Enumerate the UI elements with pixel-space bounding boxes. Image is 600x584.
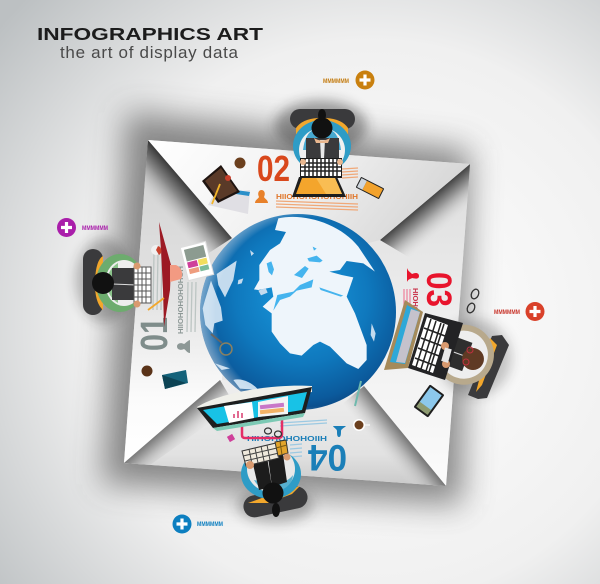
pencil xyxy=(148,298,164,310)
monitor edge xyxy=(159,222,171,327)
person 03 xyxy=(384,300,511,399)
text lines xyxy=(280,420,327,457)
fold shadow: bottom-right xyxy=(340,386,446,486)
person icon xyxy=(255,190,268,203)
globe xyxy=(200,214,396,410)
laptop xyxy=(384,300,463,380)
envelope panel xyxy=(124,140,470,486)
button: purple plus with label: MMMMMM xyxy=(82,225,108,232)
button: blue plus with label xyxy=(172,514,223,534)
heading label: HIIOHOHOHOHOH xyxy=(178,266,185,334)
button: purple plus with label xyxy=(57,218,108,237)
globe rim xyxy=(200,214,396,410)
pencil xyxy=(212,184,220,204)
laptop xyxy=(292,158,346,197)
text lines xyxy=(153,253,196,332)
number 03: 03 xyxy=(419,272,458,307)
red frame xyxy=(242,420,282,438)
section 03 xyxy=(404,268,480,418)
button: red plus with label: MMMMMM xyxy=(494,309,520,316)
text lines xyxy=(276,168,358,210)
coffee xyxy=(234,158,246,168)
person icon xyxy=(177,340,190,353)
heading label: HIIOHOHOHOHIH xyxy=(247,434,327,441)
section 02 xyxy=(202,148,384,214)
bottom flap xyxy=(124,380,446,486)
right flap xyxy=(364,164,470,486)
pie note xyxy=(170,265,182,282)
title: INFOGRAPHICS ART xyxy=(37,24,263,44)
keyboard xyxy=(134,267,151,303)
heading label: HIOHOH xyxy=(411,288,418,318)
coffee xyxy=(142,366,152,376)
top flap xyxy=(148,140,470,262)
button: blue plus with label: MMMMMM xyxy=(197,521,223,528)
number 01: 01 xyxy=(134,317,176,351)
section 01 xyxy=(134,222,214,389)
tablet xyxy=(162,370,188,389)
wallet xyxy=(202,165,240,203)
person 02 xyxy=(275,100,367,197)
person icon xyxy=(333,426,346,437)
person 04 xyxy=(237,440,313,523)
pen xyxy=(355,381,361,406)
envelope drop shadow xyxy=(102,112,470,505)
section 04 xyxy=(197,381,370,478)
heading label: HIIOHOHOHOHOHIIH xyxy=(276,194,358,201)
person icon xyxy=(407,268,419,282)
button: red plus with label xyxy=(494,302,544,321)
glasses xyxy=(264,428,282,437)
magnifier xyxy=(211,334,232,355)
person 01 xyxy=(76,238,164,322)
continents xyxy=(203,217,376,390)
monitor xyxy=(197,386,312,431)
keyboard xyxy=(242,440,288,466)
glasses xyxy=(466,288,480,314)
number 04: 04 xyxy=(308,437,347,478)
button: orange plus with label: MMMMMM xyxy=(323,78,349,85)
fold shadow: bottom-left xyxy=(124,380,235,465)
button: orange plus with label xyxy=(323,70,374,90)
left flap xyxy=(124,140,232,463)
paper xyxy=(209,426,238,445)
fold shadow: top-left xyxy=(143,140,232,262)
fold shadow: top-right xyxy=(380,164,470,264)
number 02: 02 xyxy=(257,148,290,189)
phone xyxy=(356,177,384,199)
text lines xyxy=(404,289,410,312)
notebook paper xyxy=(208,190,250,214)
subtitle: the art of display data xyxy=(60,43,239,62)
tablet xyxy=(413,384,445,418)
coffee xyxy=(353,419,370,431)
chart card xyxy=(180,241,214,281)
